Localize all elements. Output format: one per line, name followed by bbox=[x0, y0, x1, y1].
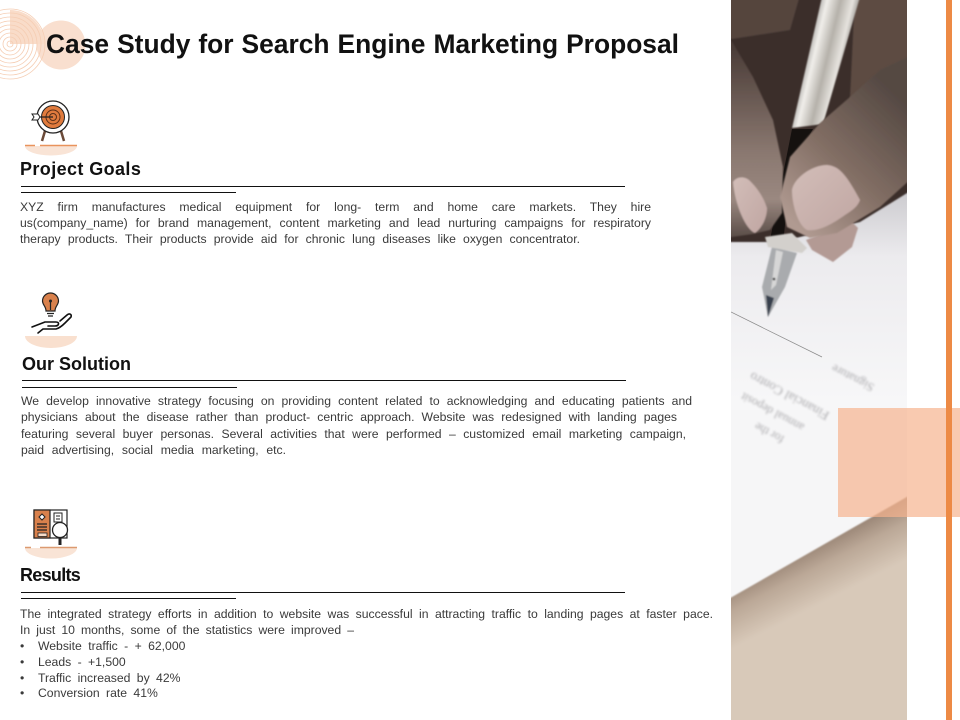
heading: project goals: Project Goals bbox=[20, 159, 141, 179]
panel: our solution bbox=[21, 292, 692, 457]
panel: project goals bbox=[20, 100, 651, 246]
text: physicians about the disease rather than product- centric approach. Website was redesigned with landing pages bbox=[21, 410, 677, 424]
icon: light bulb over hand bbox=[25, 292, 77, 348]
blurred document text: Signature bbox=[829, 361, 876, 395]
text: Traffic increased by 42% bbox=[38, 671, 180, 685]
panel: results bbox=[20, 509, 713, 700]
decorative concentric circles bbox=[0, 8, 86, 80]
lower finger bbox=[806, 222, 858, 262]
text: • bbox=[20, 686, 24, 700]
text: results bbox=[20, 607, 713, 700]
heading: our solution: Our Solution bbox=[22, 354, 131, 374]
text: project goals bbox=[20, 200, 651, 246]
text: • bbox=[20, 639, 24, 653]
text: featuring several buyer personas. Several activities that were performed – customized email marketing campaign, bbox=[21, 427, 686, 441]
thumb bbox=[780, 55, 912, 238]
icon: target with arrow bbox=[25, 100, 77, 156]
decorative translucent rectangle bbox=[838, 408, 960, 517]
heading: results: Results bbox=[20, 565, 80, 585]
signature line bbox=[731, 312, 822, 357]
title: Case Study for Search Engine Marketing Proposal bbox=[46, 29, 679, 59]
text: • bbox=[20, 655, 24, 669]
blurred document text: annual deposit bbox=[738, 389, 806, 435]
dark hand background bbox=[725, 0, 912, 242]
orange vertical bar bbox=[946, 0, 952, 720]
text: Conversion rate 41% bbox=[38, 686, 158, 700]
blurred document text: Financial Contro bbox=[747, 369, 831, 424]
rule bbox=[22, 380, 626, 381]
text: our solution bbox=[21, 394, 692, 457]
text: In just 10 months, some of the statistics were improved – bbox=[20, 623, 354, 637]
text: XYZ firm manufactures medical equipment for long- term and home care markets. They hire bbox=[20, 200, 651, 214]
pen nib bbox=[762, 233, 807, 317]
left finger bbox=[725, 36, 783, 238]
photo: hand signing a document with a fountain pen bbox=[731, 0, 907, 720]
text: • bbox=[20, 671, 24, 685]
icon: report with magnifier bbox=[25, 509, 77, 558]
blurred document text bbox=[738, 361, 876, 447]
pen grip bbox=[770, 129, 813, 240]
text: Leads - +1,500 bbox=[38, 655, 126, 669]
rule bbox=[21, 592, 625, 593]
text: therapy products. Their products provide aid for chronic lung diseases like oxygen concentrator. bbox=[20, 232, 580, 246]
text: The integrated strategy efforts in addition to website was successful in attracting traffic to landing pages at faster pace. bbox=[20, 607, 713, 621]
rule bbox=[21, 186, 625, 187]
desk surface bbox=[725, 494, 912, 720]
paper shaded area bbox=[731, 170, 907, 410]
text: paid advertising, social media marketing, etc. bbox=[21, 443, 286, 457]
text: us(company_name) for brand management, content marketing and lead nurturing campaigns for respiratory bbox=[20, 216, 651, 230]
blurred document text: for the bbox=[752, 419, 786, 447]
text: Website traffic - + 62,000 bbox=[38, 639, 185, 653]
text: We develop innovative strategy focusing on providing content related to acknowledging and educating patients and bbox=[21, 394, 692, 408]
pen barrel bbox=[792, 0, 860, 128]
